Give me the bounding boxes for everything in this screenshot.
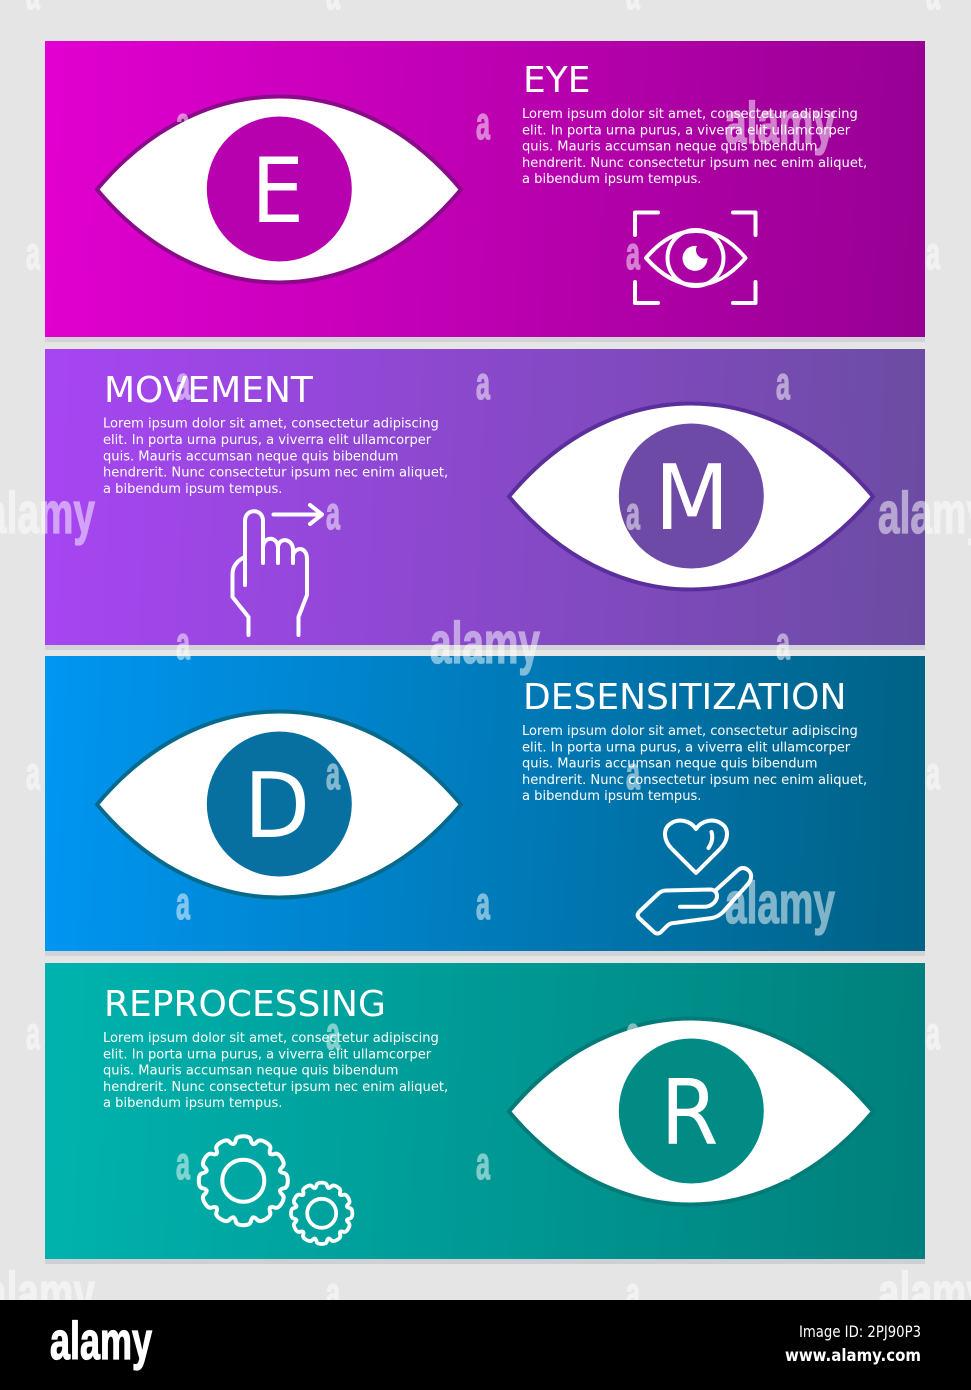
text block: desensitization description xyxy=(522,724,867,804)
watermark overlay: a xyxy=(326,227,340,279)
watermark overlay: a xyxy=(776,1137,790,1189)
image id: Image ID: 2PJ90P3 xyxy=(799,1322,921,1341)
text block: eye description: a bibendum ipsum tempus. xyxy=(522,172,701,187)
icon: large eye with letter D: D xyxy=(244,754,310,859)
text block: reprocessing description: a bibendum ipsum tempus. xyxy=(103,1096,282,1111)
watermark overlay: a xyxy=(476,357,490,409)
text block: eye description: elit. In porta urna purus, a viverra elit ullamcorper xyxy=(522,123,851,138)
website: www.alamy.com xyxy=(785,1346,921,1366)
footer bar xyxy=(0,1300,971,1390)
watermark overlay: a xyxy=(26,227,40,279)
icon: eye scan xyxy=(635,212,756,303)
icon: heart in hand xyxy=(638,821,751,934)
icon: large eye with letter E: E xyxy=(251,139,304,244)
icon: hand swipe xyxy=(232,505,322,635)
watermark overlay: a xyxy=(926,747,940,799)
watermark overlay: a xyxy=(476,877,490,929)
text block: eye description: quis. Mauris accumsan neque quis bibendum xyxy=(522,140,818,155)
icon: large eye with letter R: R xyxy=(660,1061,718,1166)
text block: eye description: Lorem ipsum dolor sit amet, consectetur adipiscing xyxy=(522,107,858,122)
watermark overlay: alamy xyxy=(430,611,540,676)
icon: gears xyxy=(199,1136,352,1244)
watermark overlay: a xyxy=(476,1137,490,1189)
panel: desensitization xyxy=(45,656,925,956)
text block: desensitization description: quis. Mauris accumsan neque quis bibendum xyxy=(522,757,818,772)
panel: reprocessing xyxy=(45,963,925,1264)
watermark overlay: a xyxy=(176,357,190,409)
text block: eye description xyxy=(522,107,867,187)
icon: large eye with letter M xyxy=(509,404,873,590)
watermark overlay: a xyxy=(626,1007,640,1059)
watermark overlay: a xyxy=(176,877,190,929)
watermark overlay: a xyxy=(926,1007,940,1059)
text block: desensitization description: Lorem ipsum dolor sit amet, consectetur adipiscing xyxy=(522,724,858,739)
icon: large eye with letter E xyxy=(97,96,461,282)
heading: eye: EYE xyxy=(523,60,590,101)
watermark overlay: a xyxy=(326,747,340,799)
watermark overlay: a xyxy=(776,357,790,409)
text block: movement description: elit. In porta urna purus, a viverra elit ullamcorper xyxy=(103,433,432,448)
text block: reprocessing description: quis. Mauris accumsan neque quis bibendum xyxy=(103,1064,398,1079)
text block: reprocessing description xyxy=(103,1031,448,1111)
watermark overlay: a xyxy=(626,747,640,799)
heading: reprocessing: REPROCESSING xyxy=(104,984,386,1025)
panel: eye xyxy=(45,41,925,342)
text block: desensitization description: elit. In porta urna purus, a viverra elit ullamcorper xyxy=(522,740,851,755)
text block: reprocessing description: Lorem ipsum dolor sit amet, consectetur adipiscing xyxy=(103,1031,439,1046)
watermark overlay: a xyxy=(926,227,940,279)
text block: movement description: a bibendum ipsum tempus. xyxy=(103,482,282,497)
watermark overlay: a xyxy=(176,1137,190,1189)
watermark overlay: a xyxy=(626,227,640,279)
watermark overlay: a xyxy=(326,1267,340,1319)
text block: desensitization description: hendrerit. Nunc consectetur ipsum nec enim aliquet, xyxy=(522,773,867,788)
watermark overlay: a xyxy=(176,617,190,669)
watermark overlay: a xyxy=(26,1007,40,1059)
text block: movement description: hendrerit. Nunc consectetur ipsum nec enim aliquet, xyxy=(103,466,448,481)
panel: movement xyxy=(45,349,925,650)
watermark overlay: a xyxy=(326,1007,340,1059)
heading: movement: MOVEMENT xyxy=(104,370,314,411)
watermark overlay: alamy xyxy=(725,91,835,156)
icon: large eye with letter M: M xyxy=(654,446,730,551)
watermark overlay: a xyxy=(626,487,640,539)
watermark overlay: alamy xyxy=(725,871,835,936)
watermark overlay: a xyxy=(476,97,490,149)
text block: movement description: Lorem ipsum dolor sit amet, consectetur adipiscing xyxy=(103,417,439,432)
watermark overlay: a xyxy=(26,747,40,799)
text block: eye description: hendrerit. Nunc consectetur ipsum nec enim aliquet, xyxy=(522,156,867,171)
heading: desensitization: DESENSITIZATION xyxy=(523,677,846,718)
watermark overlay: a xyxy=(626,1267,640,1319)
text block: reprocessing description: hendrerit. Nunc consectetur ipsum nec enim aliquet, xyxy=(103,1080,448,1095)
text block: reprocessing description: elit. In porta urna purus, a viverra elit ullamcorper xyxy=(103,1047,432,1062)
footer logo: alamy xyxy=(50,1312,152,1371)
text block: desensitization description: a bibendum ipsum tempus. xyxy=(522,789,701,804)
icon: large eye with letter R xyxy=(509,1018,873,1204)
text block: movement description xyxy=(103,417,448,497)
text block: movement description: quis. Mauris accumsan neque quis bibendum xyxy=(103,449,398,464)
icon: large eye with letter D xyxy=(97,712,461,898)
watermark overlay: a xyxy=(326,487,340,539)
watermark overlay: a xyxy=(776,617,790,669)
watermark overlay: a xyxy=(176,97,190,149)
